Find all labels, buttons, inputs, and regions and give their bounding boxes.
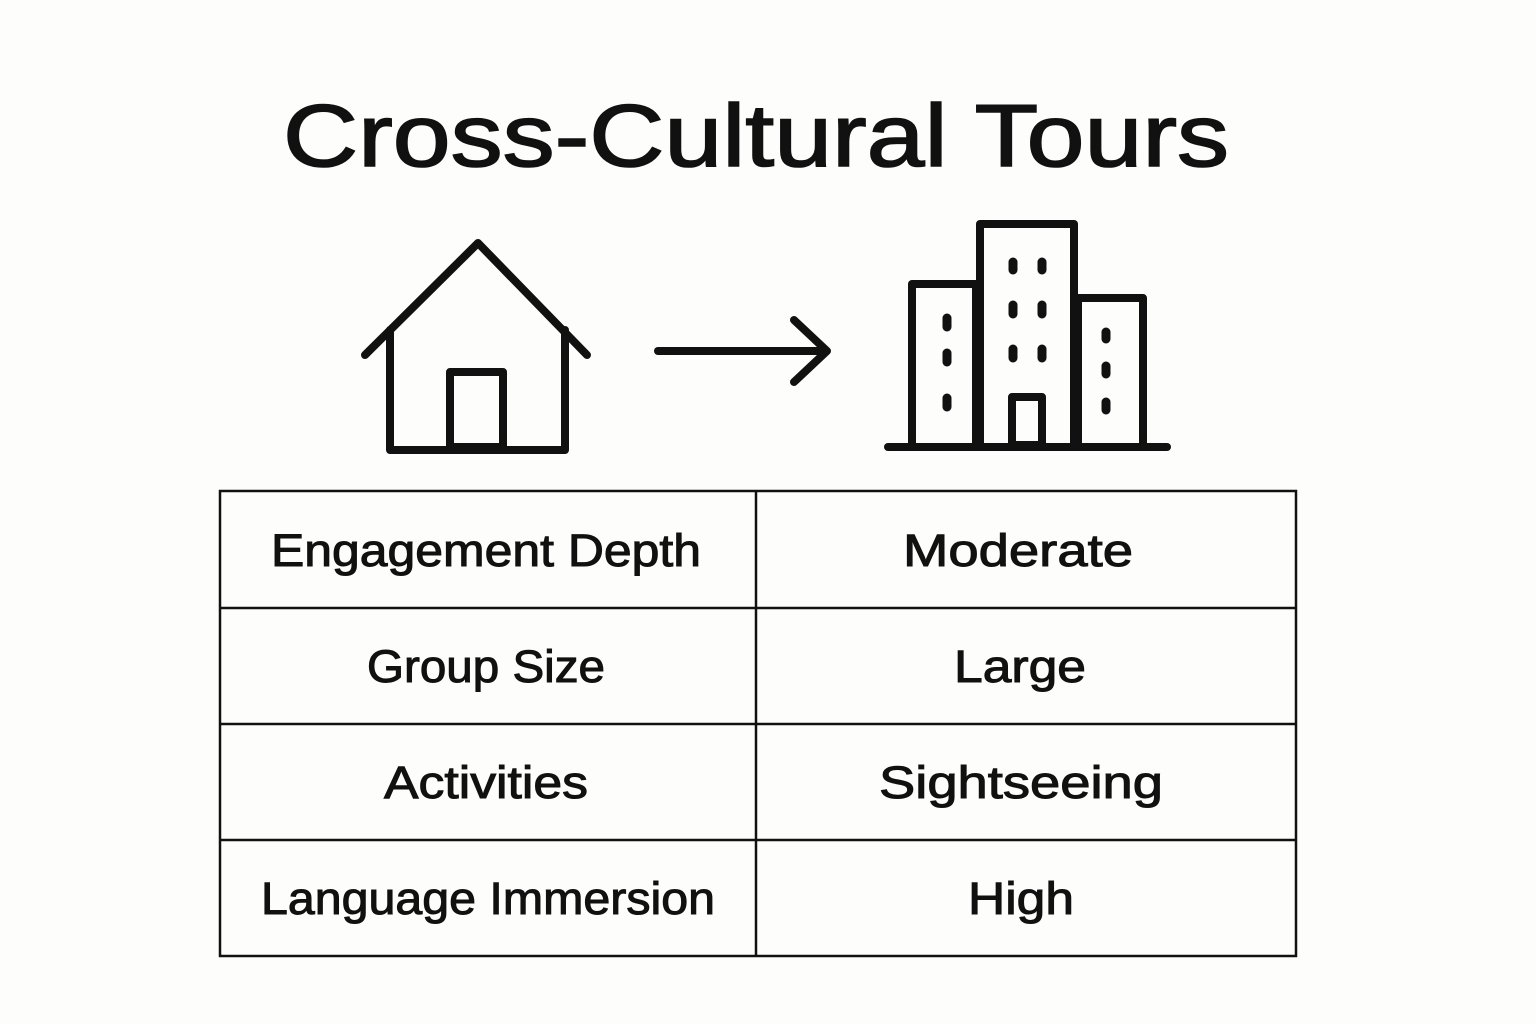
row: language immersion: Language Immersion xyxy=(261,873,715,924)
row: engagement depth xyxy=(271,525,1133,576)
row: activities: Sightseeing xyxy=(879,757,1163,808)
row: engagement depth: Moderate xyxy=(903,525,1133,576)
row: language immersion: High xyxy=(968,873,1074,924)
arrow xyxy=(658,320,827,382)
comparison table xyxy=(220,491,1296,956)
row: engagement depth: Engagement Depth xyxy=(271,525,701,576)
row: language immersion xyxy=(261,873,1074,924)
row: activities xyxy=(384,757,1163,808)
title: Cross-Cultural Tours xyxy=(283,86,1229,185)
icon: house xyxy=(365,243,587,450)
row: activities: Activities xyxy=(384,757,588,808)
row: group size: Large xyxy=(954,641,1086,692)
row: group size xyxy=(367,641,1086,692)
icon: city buildings xyxy=(888,224,1167,447)
row: group size: Group Size xyxy=(367,641,605,692)
